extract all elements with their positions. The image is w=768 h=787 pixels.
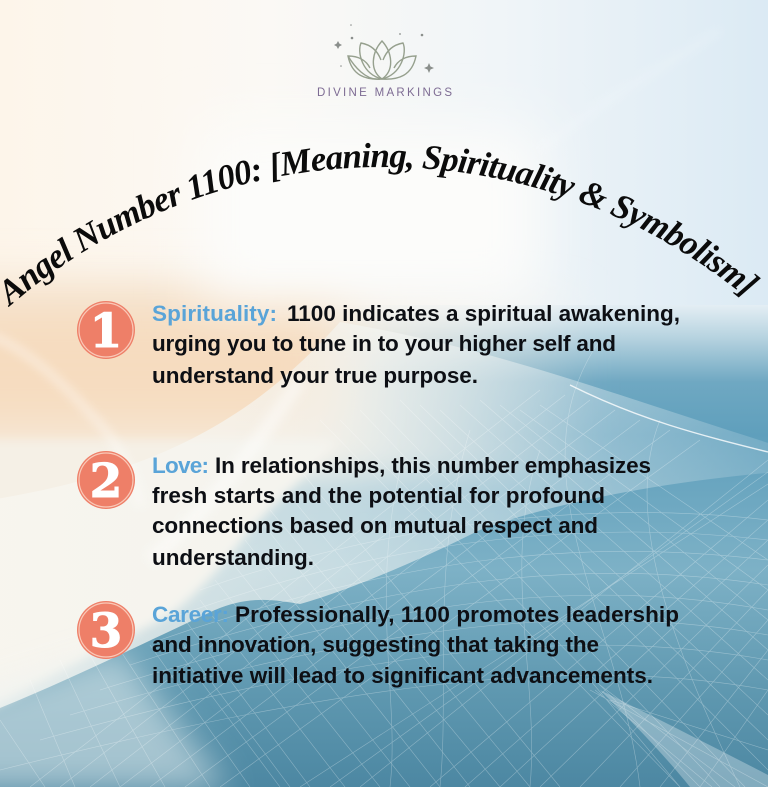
- logo wordmark: DIVINE MARKINGS: [317, 87, 452, 99]
- text: career: Professionally, 1100 promotes leadership: [235, 602, 679, 627]
- text: love: In relationships, this number emphasizes: [215, 453, 651, 478]
- text: love: fresh starts and the potential for profound: [152, 483, 605, 508]
- item 2: love: [77, 451, 657, 570]
- icon: number 2 badge: 2: [90, 454, 122, 509]
- background: net lines: [0, 340, 768, 787]
- icon: number 1 badge: 1: [90, 304, 122, 359]
- text: love: understanding.: [152, 545, 314, 570]
- infographic canvas: Angel Number 1100: [Meaning, Spirituality & Symbolism]: [4, 142, 761, 307]
- text: spirituality: 1100 indicates a spiritual awakening,: [287, 301, 680, 326]
- text: love: Love:: [152, 453, 209, 478]
- text: career: initiative will lead to significant advancements.: [152, 663, 653, 688]
- text: career: Career:: [152, 602, 229, 627]
- icon: stars: [334, 24, 434, 73]
- text: spirituality: Spirituality:: [152, 301, 277, 326]
- text: career: and innovation, suggesting that taking the: [152, 632, 599, 657]
- logo: Divine Markings: [317, 24, 452, 99]
- text: love: connections based on mutual respect and: [152, 513, 598, 538]
- icon: number 1 badge: [77, 301, 135, 359]
- title on arc: [10, 167, 756, 306]
- icon: number 3 badge: 3: [90, 604, 122, 659]
- icon: lotus: [348, 41, 416, 79]
- text: spirituality: understand your true purpose.: [152, 363, 478, 388]
- item 3: career: [77, 601, 685, 688]
- item 1: spirituality: [77, 301, 686, 388]
- text: spirituality: urging you to tune in to your higher self and: [152, 331, 616, 356]
- icon: number 3 badge: [77, 601, 135, 659]
- icon: number 2 badge: [77, 451, 135, 509]
